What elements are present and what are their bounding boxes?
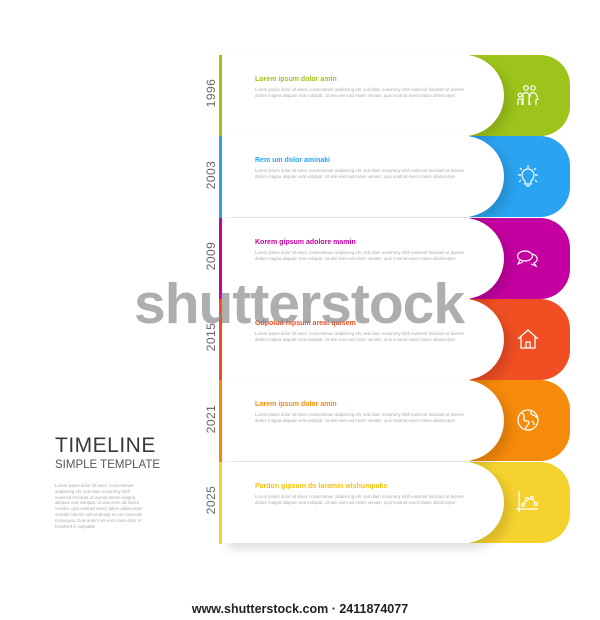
icon: globe bbox=[517, 409, 539, 431]
tabs bbox=[470, 55, 570, 543]
subtitle: SIMPLE TEMPLATE bbox=[55, 459, 160, 471]
years bbox=[204, 79, 218, 514]
card 2009: Lorem ipsum dolor sit amet, consectetuer adipiscing elit, sed diam nonummy nibh euismod tincidunt ut laoreet dolore magna aliquam erat volutpat. Ut wisi enim ad minim veniam, quis nostrud exerci tation ullamcorper bbox=[255, 250, 464, 261]
card 2021: Lorem ipsum dolor sit amet, consectetuer adipiscing elit, sed diam nonummy nibh euismod tincidunt ut laoreet dolore magna aliquam erat volutpat. Ut wisi enim ad minim veniam, quis nostrud exerci tation ullamcorper bbox=[255, 412, 464, 423]
card 2025: Pardon gipsum do laramin wishumpaks bbox=[255, 483, 387, 490]
years: 2003 bbox=[204, 161, 218, 189]
card 2025 bbox=[222, 462, 504, 543]
card 2009: Korem gipsum adolore mamin bbox=[255, 239, 356, 246]
icon: bulb bbox=[518, 165, 538, 187]
title: TIMELINE bbox=[55, 434, 156, 457]
description text: Lorem ipsum dolor sit amet, consectetuer adipiscing elit, sed diam nonummy nibh euismod tincidunt ut laoreet dolore magna aliquam erat volutpat. Ut wisi enim ad minim veniam, quis nostrud exerci tation ullamcorper suscipit lobortis nisl ut aliquip ex ea commodo consequat. Duis autem vel eum iriure dolor in hendrerit in vulputate bbox=[55, 483, 143, 529]
title bbox=[55, 434, 160, 471]
card 2003: Rem um dolor aminaki bbox=[255, 157, 330, 164]
card 2025: Lorem ipsum dolor sit amet, consectetuer adipiscing elit, sed diam nonummy nibh euismod tincidunt ut laoreet dolore magna aliquam erat volutpat. Ut wisi enim ad minim veniam, quis nostrud exerci tation ullamcorper bbox=[255, 494, 464, 505]
timeline line bbox=[219, 55, 222, 544]
icon: chart bbox=[516, 491, 538, 512]
years: 2015 bbox=[204, 323, 218, 351]
card 2009 bbox=[222, 218, 504, 299]
years: 2025 bbox=[204, 486, 218, 514]
card 2003: Lorem ipsum dolor sit amet, consectetuer adipiscing elit, sed diam nonummy nibh euismod tincidunt ut laoreet dolore magna aliquam erat volutpat. Ut wisi enim ad minim veniam, quis nostrud exerci tation ullamcorper bbox=[255, 168, 464, 179]
watermark: shutterstock bbox=[134, 272, 464, 336]
years: 2021 bbox=[204, 405, 218, 433]
card 2021 bbox=[222, 380, 504, 461]
icon: family bbox=[517, 85, 539, 106]
icon: house bbox=[518, 329, 538, 349]
card 2015: Lorem ipsum dolor sit amet, consectetuer adipiscing elit, sed diam nonummy nibh euismod tincidunt ut laoreet dolore magna aliquam erat volutpat. Ut wisi enim ad minim veniam, quis nostrud exerci tation ullamcorper bbox=[255, 331, 464, 342]
card 2015 bbox=[222, 299, 504, 380]
card 1996: Lorem ipsum dolor amin bbox=[255, 76, 337, 83]
icon: chat bbox=[516, 250, 538, 268]
card 2003 bbox=[222, 136, 504, 217]
years: 2009 bbox=[204, 242, 218, 270]
years: 1996 bbox=[204, 79, 218, 107]
footer url: www.shutterstock.com · 2411874077 bbox=[192, 602, 408, 616]
card 1996: Lorem ipsum dolor sit amet, consectetuer adipiscing elit, sed diam nonummy nibh euismod tincidunt ut laoreet dolore magna aliquam erat volutpat. Ut wisi enim ad minim veniam, quis nostrud exerci tation ullamcorper bbox=[255, 87, 464, 98]
card 2015: Odpolud hipsum areat quisem bbox=[255, 320, 356, 327]
card 1996 bbox=[222, 55, 504, 136]
card 2021: Lorem ipsum dolor amin bbox=[255, 401, 337, 408]
